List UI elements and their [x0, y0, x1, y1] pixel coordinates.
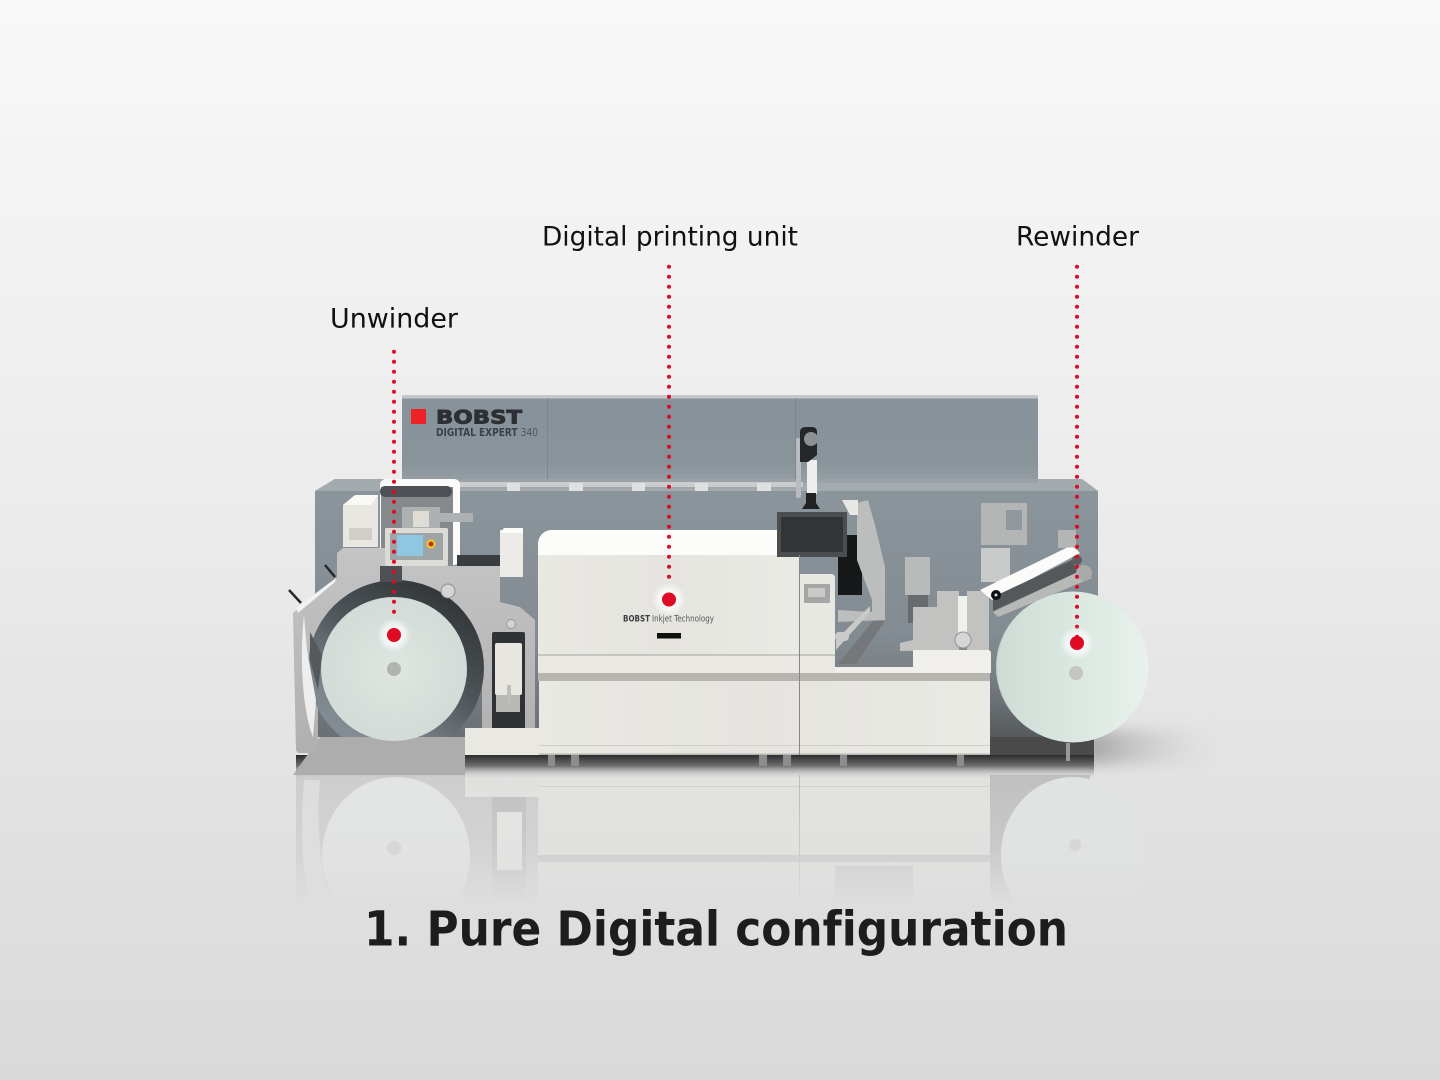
floor reflection of machine	[296, 775, 1090, 887]
white roller	[958, 596, 967, 642]
dark strap	[310, 632, 322, 690]
unit: unwinder	[289, 479, 540, 775]
callout: Unwinder	[330, 304, 459, 652]
dark cylinders	[457, 555, 501, 566]
rewinder roll	[996, 592, 1148, 742]
control panel	[385, 528, 448, 566]
printer highlight top	[538, 512, 799, 555]
base plinth	[465, 728, 540, 755]
white gap left of housing	[302, 615, 316, 737]
logo: BOBST Digital Expert 340	[411, 406, 538, 439]
adjustable feet	[548, 755, 964, 766]
knob	[441, 584, 455, 598]
right service panel	[799, 574, 835, 667]
marker	[1060, 626, 1094, 660]
marker	[652, 582, 686, 616]
floor plate	[293, 737, 465, 775]
white side box	[500, 528, 523, 577]
callout: Digital printing unit	[542, 222, 798, 616]
arm with knobs	[289, 565, 336, 613]
callout: Rewinder: Rewinder	[1016, 222, 1140, 252]
cabinet cutout	[492, 620, 525, 735]
printer upper body	[538, 555, 799, 655]
marker	[377, 618, 411, 652]
unit: digital printing	[538, 512, 990, 766]
logo: BOBST Digital Expert 340: BOBST	[436, 406, 522, 428]
callout: Unwinder: Unwinder	[330, 304, 459, 334]
monitor arm	[796, 427, 820, 509]
dotted leader	[667, 267, 671, 587]
grey plates on rear panel	[905, 503, 1076, 623]
unwinder roll	[321, 597, 467, 741]
body strip and lower body	[538, 555, 990, 755]
title: 1. Pure Digital configuration	[364, 902, 1068, 958]
machine	[289, 395, 1148, 775]
dotted leader	[392, 352, 396, 622]
rear upper panel	[402, 395, 1038, 490]
printer branding	[623, 614, 714, 624]
dotted leader	[1075, 267, 1079, 637]
roll housing	[308, 580, 484, 737]
callout: Rewinder	[1016, 222, 1140, 660]
printer branding: Inkjet Technology	[652, 614, 714, 624]
printer branding: BOBST	[623, 614, 650, 624]
hub	[955, 632, 971, 648]
cable rail	[458, 482, 803, 491]
upper left tension mechanism	[835, 500, 885, 664]
logo: BOBST Digital Expert 340: DIGITAL EXPERT 340	[436, 427, 538, 439]
callout: Digital printing unit: Digital printing unit	[542, 222, 798, 252]
transport arm	[980, 547, 1092, 617]
side frame	[293, 548, 535, 753]
rear lower panel	[315, 479, 1098, 755]
floor shadow	[296, 730, 1235, 779]
unit: rewinder	[835, 547, 1148, 761]
monitor	[777, 512, 847, 557]
housing neck	[380, 566, 402, 582]
black label	[657, 633, 681, 638]
white deck	[835, 650, 991, 673]
stepped bracket	[900, 591, 989, 651]
roll stand	[1066, 743, 1070, 761]
upper head	[380, 479, 473, 565]
small white box with gauge	[343, 495, 378, 547]
